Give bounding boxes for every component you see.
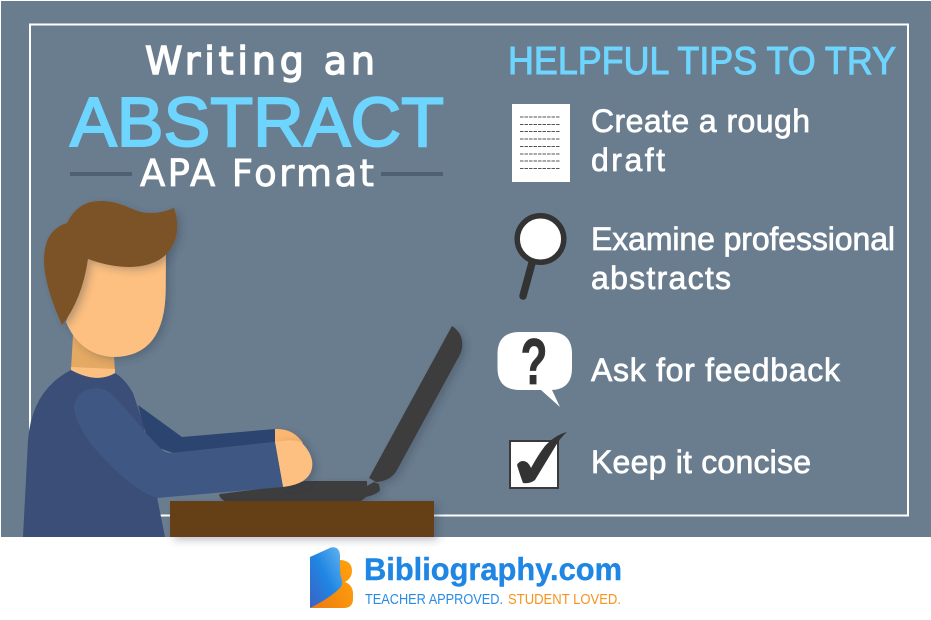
near hand bbox=[275, 440, 312, 487]
tip 4 bbox=[510, 432, 811, 488]
neck bbox=[71, 335, 115, 375]
tip text bbox=[591, 103, 810, 178]
tip text: Create a rough bbox=[591, 103, 810, 139]
tip text bbox=[591, 221, 895, 296]
logo mark bbox=[310, 547, 353, 608]
title: Writing an: Writing an bbox=[145, 39, 375, 83]
tip 3 bbox=[498, 325, 841, 407]
tip text: draft bbox=[591, 142, 665, 178]
logo tagline: STUDENT LOVED. bbox=[508, 592, 621, 608]
title: APA Format: APA Format bbox=[140, 152, 374, 195]
tip text: Ask for feedback bbox=[591, 352, 841, 388]
hair bbox=[44, 201, 177, 325]
tip 1 bbox=[512, 103, 810, 182]
near arm bbox=[74, 388, 283, 498]
icon: check box bbox=[510, 432, 567, 488]
illustration: person at laptop bbox=[23, 201, 462, 537]
logo tagline bbox=[365, 592, 621, 608]
far hand bbox=[275, 429, 303, 445]
left rule bbox=[70, 172, 132, 176]
tip text: Examine professional bbox=[591, 221, 895, 257]
body bbox=[23, 370, 165, 537]
right rule bbox=[381, 172, 443, 176]
tip text: Keep it concise bbox=[591, 444, 811, 480]
tip 2 bbox=[517, 216, 895, 296]
white frame bbox=[30, 24, 908, 516]
laptop bbox=[219, 326, 462, 502]
title block bbox=[70, 39, 444, 195]
face bbox=[66, 250, 166, 357]
icon: document bbox=[512, 104, 570, 182]
title: ABSTRACT: ABSTRACT bbox=[70, 83, 444, 161]
tip text: abstracts bbox=[591, 260, 731, 296]
logo tagline: TEACHER APPROVED. bbox=[365, 592, 503, 608]
icon: speech bubble with question mark: ? bbox=[520, 325, 548, 398]
logo wordmark: Bibliography.com bbox=[364, 551, 622, 587]
collar skin bbox=[71, 367, 115, 378]
icon: speech bubble with question mark bbox=[498, 325, 572, 407]
far arm bbox=[138, 405, 275, 453]
logo: Bibliography.com bbox=[310, 547, 622, 608]
heading: helpful tips: HELPFUL TIPS TO TRY bbox=[508, 40, 896, 83]
table bbox=[170, 501, 434, 537]
icon: magnifier bbox=[517, 216, 564, 296]
